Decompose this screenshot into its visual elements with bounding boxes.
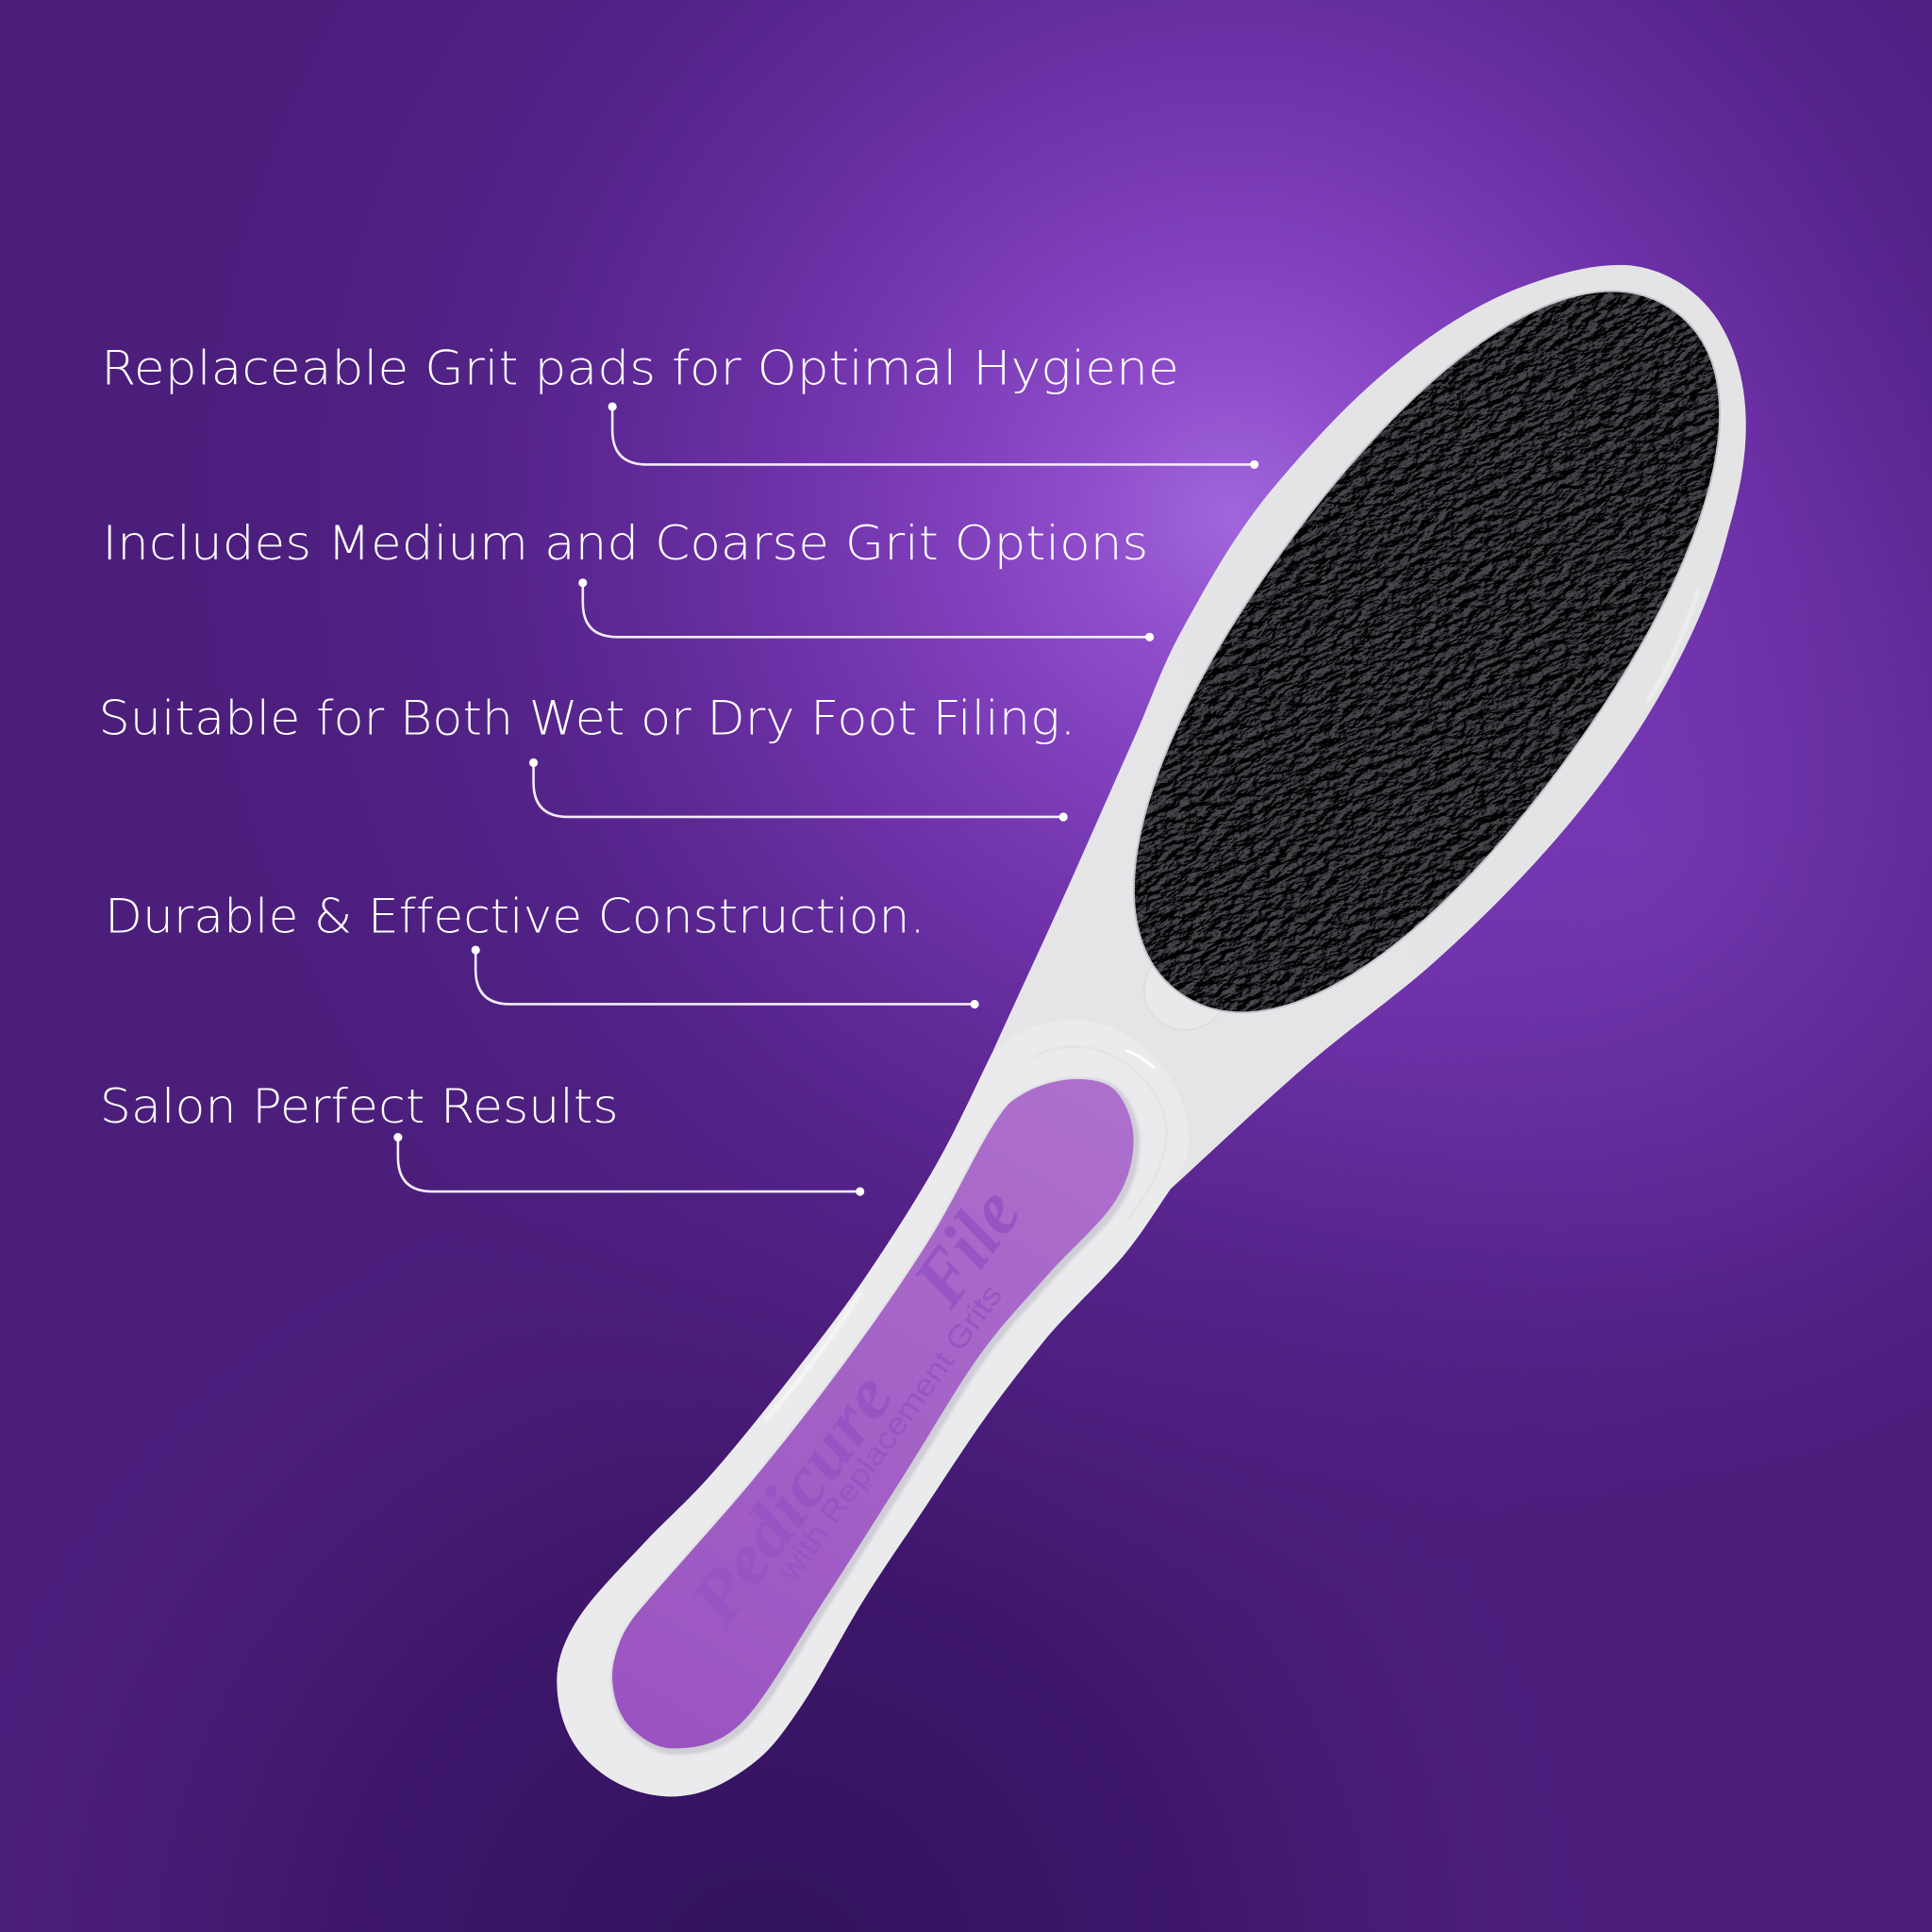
callout: salon results: [100, 1079, 864, 1196]
callout: durable construction: Durable & Effective Construction.: [105, 890, 925, 944]
callout: wet or dry filing: Suitable for Both Wet or Dry Foot Filing.: [98, 691, 1075, 745]
pad release tab: [1144, 961, 1220, 1030]
callout: replaceable grit pads: [101, 341, 1258, 469]
grit pad: [1134, 292, 1719, 1011]
callout: wet or dry filing: [98, 691, 1075, 822]
collar inner ring: [1033, 1046, 1166, 1220]
pad edge: [1037, 208, 1817, 1096]
grip groove: [615, 1082, 1136, 1751]
File wordmark: File: [896, 1173, 1037, 1322]
callout: salon results: Salon Perfect Results: [100, 1079, 619, 1134]
Pedicure wordmark: Pedicure: [675, 1358, 908, 1640]
handle highlight: [766, 1293, 860, 1420]
callout: durable construction: [105, 890, 979, 1008]
tagline: with Replacement Grits: [770, 1277, 1008, 1588]
purple grip: [612, 1079, 1134, 1748]
pedicure file product: [557, 264, 1746, 1796]
callout: medium and coarse grit: Includes Medium and Coarse Grit Options: [102, 516, 1148, 571]
handle collar: [557, 1020, 1189, 1796]
file body: [557, 265, 1746, 1796]
rim highlight: [1649, 591, 1698, 700]
grip lettering: [675, 1173, 1037, 1640]
callout: medium and coarse grit: [102, 516, 1154, 641]
collar highlight: [1127, 1051, 1154, 1067]
feature callouts: [98, 341, 1258, 1196]
callout: replaceable grit pads: Replaceable Grit pads for Optimal Hygiene: [101, 341, 1179, 396]
